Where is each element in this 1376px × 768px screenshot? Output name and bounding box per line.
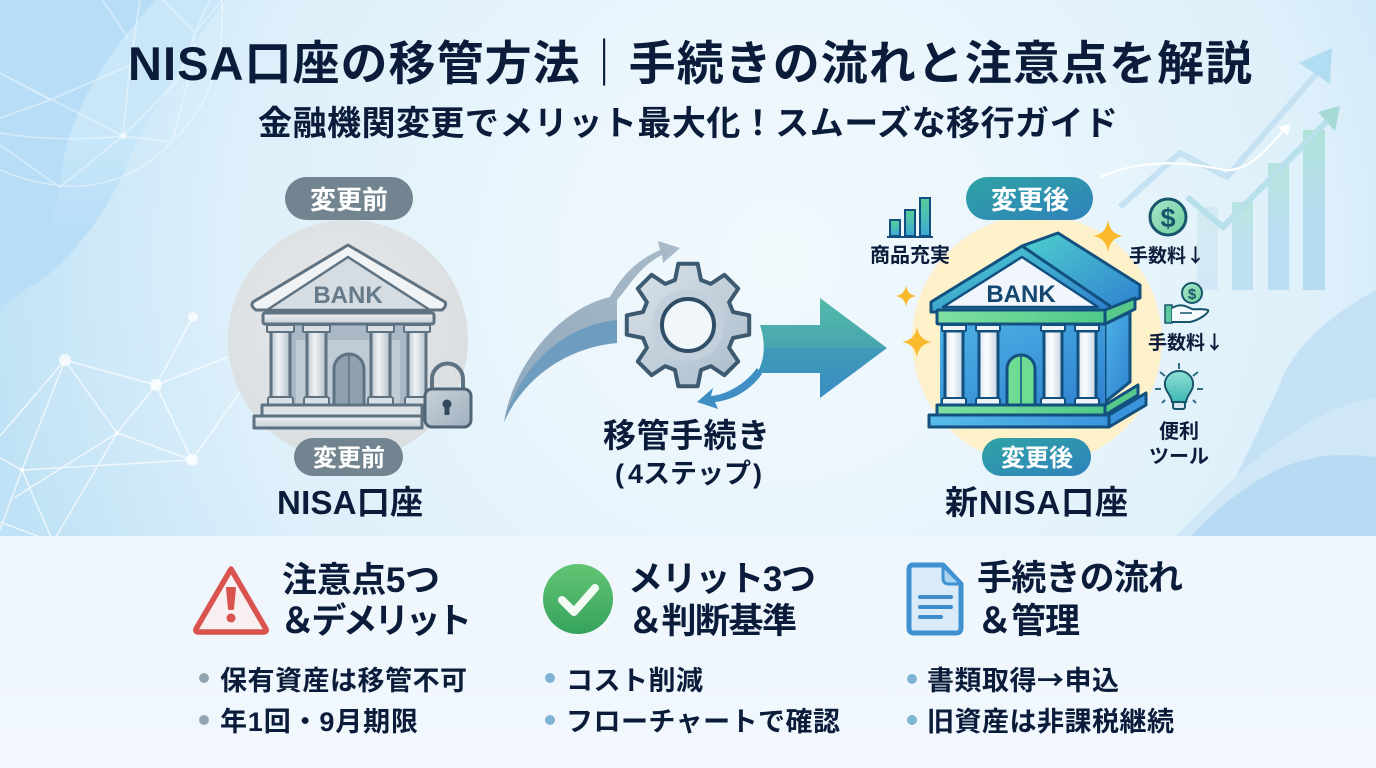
label: BANK: BANK <box>313 282 383 309</box>
heading: cautions: 注意点5つ <box>282 561 440 600</box>
icon: old bank <box>252 245 446 428</box>
label: tools: ツール <box>1149 446 1209 468</box>
label: four steps: ) <box>753 459 762 489</box>
icon: hand with coin <box>1165 283 1208 323</box>
subtitle: 金融機関変更でメリット最大化！スムーズな移行ガイド <box>258 104 1118 143</box>
bullet list: procedure: 旧資産は非課税継続 <box>927 707 1174 737</box>
icon: bar chart <box>887 198 933 237</box>
bullet list: merits: フローチャートで確認 <box>566 707 840 737</box>
arrow: small return <box>697 368 762 409</box>
icon: hand with coin: $ <box>1188 286 1197 303</box>
label: handy: 便利 <box>1159 420 1199 443</box>
yellow circle <box>912 215 1162 465</box>
badge: before top: 変更前 <box>310 185 388 215</box>
label: BANK new: BANK <box>986 281 1056 308</box>
badge: after bottom <box>982 438 1091 476</box>
label: four steps: ( <box>615 459 624 489</box>
panel: cautions <box>196 561 472 737</box>
badge: before bottom <box>294 438 403 476</box>
icon: warning triangle <box>196 569 266 632</box>
bullet list: procedure <box>907 659 1174 737</box>
icon: green check <box>543 564 613 634</box>
title: NISA口座の移管方法｜手続きの流れと注意点を解説 <box>128 37 1252 90</box>
grey circle <box>228 220 468 460</box>
heading: demerits: ＆デメリット <box>280 601 472 641</box>
bullet list: merits: コスト削減 <box>566 666 703 696</box>
badge: before top <box>285 177 413 220</box>
badge: after top: 変更後 <box>991 185 1069 215</box>
heading: criteria: ＆判断基準 <box>628 602 797 641</box>
label: NISA account: NISA口座 <box>277 484 423 521</box>
icon: light bulb <box>1155 363 1203 409</box>
label: product range: 商品充実 <box>870 244 950 267</box>
badge: after top <box>966 177 1093 220</box>
icon: gear <box>627 264 749 386</box>
icon: new bank <box>929 233 1146 427</box>
heading: merits: メリット3つ <box>628 560 816 599</box>
panel: procedure <box>907 559 1183 737</box>
bullet list: merits <box>545 666 840 737</box>
icon: dollar coin: $ <box>1160 203 1176 233</box>
bullet list: cautions: 年1回・9月期限 <box>220 707 418 737</box>
icon: sparkles <box>895 220 1123 357</box>
bullet list: cautions <box>199 666 467 737</box>
badge: before bottom: 変更前 <box>313 445 385 472</box>
label: transfer steps: 移管手続き <box>603 417 770 454</box>
panel: transfer process <box>504 241 887 489</box>
bullet list: cautions: 保有資産は移管不可 <box>220 666 467 696</box>
chart: rising arrows background <box>1100 48 1340 290</box>
badge: after bottom: 変更後 <box>1001 445 1073 472</box>
bullet list: procedure: 書類取得→申込 <box>927 659 1119 698</box>
heading: management: ＆管理 <box>977 602 1080 641</box>
arrow: teal forward <box>757 298 887 398</box>
arrow: incoming swoosh <box>504 241 680 422</box>
panel: before account <box>228 177 471 521</box>
bottom panel <box>0 536 1376 768</box>
heading: flow: 手続きの流れ <box>977 559 1183 598</box>
label: lower fee one: 手数料↓ <box>1129 241 1205 268</box>
icon: padlock <box>425 364 471 427</box>
panel: merits <box>543 560 840 737</box>
label: lower fee two: 手数料↓ <box>1148 328 1224 355</box>
icon: dollar coin <box>1150 199 1186 235</box>
label: new NISA account: 新NISA口座 <box>945 484 1128 521</box>
label: four steps: 4ステップ <box>628 459 751 489</box>
icon: document <box>909 565 961 633</box>
panel: after account <box>870 177 1224 521</box>
